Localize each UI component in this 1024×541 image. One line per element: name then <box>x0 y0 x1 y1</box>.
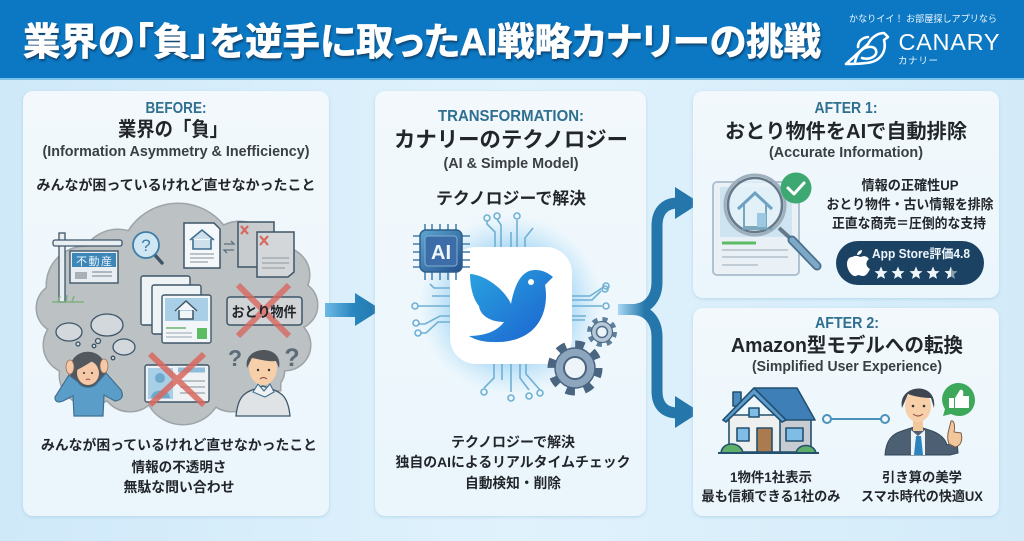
label: おとり物件 with cross: おとり物件 <box>232 304 296 320</box>
transformation label: TRANSFORMATION: <box>438 108 584 125</box>
icon: AI chip <box>413 224 470 280</box>
after 2 left text: 最も信頼できる1社のみ <box>702 488 840 504</box>
after 2 right text: 引き算の美学 <box>882 469 962 485</box>
logo: Canary <box>846 13 1000 67</box>
after 2 subtitle: (Simplified User Experience) <box>752 358 942 375</box>
badge: app store rating <box>836 241 984 285</box>
icon: house <box>718 388 819 453</box>
panel: transformation <box>375 91 646 516</box>
after 1 body text: おとり物件・古い情報を排除 <box>826 196 994 212</box>
title: 業界の「負」を逆手に取ったAI戦略カナリーの挑戦 <box>23 22 821 64</box>
arrow: fork to after panels <box>618 187 700 428</box>
after 1 heading: おとり物件をAIで自動排除 <box>725 120 967 143</box>
transformation bottom text: 独自のAIによるリアルタイムチェック <box>396 454 630 470</box>
icon: listing cards stack <box>141 276 211 343</box>
icon: AI chip: AI <box>431 242 451 264</box>
question marks: ? <box>228 345 242 371</box>
before subtitle: (Information Asymmetry & Inefficiency) <box>42 143 310 160</box>
after 1 body text <box>826 177 994 231</box>
before bottom text: 情報の不透明さ <box>132 459 226 475</box>
transformation bottom text <box>396 434 630 491</box>
after 2 heading: Amazon型モデルへの転換 <box>731 333 963 357</box>
icon: question magnifier: ? <box>141 236 151 255</box>
icon: businessman thumbs up <box>885 388 962 455</box>
transformation bottom text: テクノロジーで解決 <box>451 434 575 450</box>
icon: house document <box>184 223 220 268</box>
question marks: ? <box>284 344 300 372</box>
icon: circuit lines <box>412 213 609 401</box>
icon: app tile with bird <box>450 247 572 364</box>
before label: BEFORE: <box>146 100 206 117</box>
after 1 label: AFTER 1: <box>814 100 878 117</box>
icon: thought bubbles <box>56 314 135 360</box>
after 2 right text <box>861 469 983 504</box>
rating stars <box>874 266 958 279</box>
before bottom text <box>41 437 317 495</box>
icon: apple <box>847 250 870 276</box>
after 1 body text: 正直な商売＝圧倒的な支持 <box>832 215 986 231</box>
after 2 left text: 1物件1社表示 <box>730 469 812 485</box>
icon: question magnifier <box>133 232 162 263</box>
icon: like bubble <box>942 383 975 416</box>
after 2 label: AFTER 2: <box>815 315 879 332</box>
transformation subtitle: (AI & Simple Model) <box>444 155 578 172</box>
icon: crossed out listing <box>145 354 209 405</box>
icon: exchange arrows <box>224 241 234 253</box>
before heading: 業界の「負」 <box>118 118 228 141</box>
after 1 subtitle: (Accurate Information) <box>769 144 923 161</box>
icon: rejected documents <box>238 222 294 277</box>
rating text: App Store評価4.8 <box>872 246 970 261</box>
icon: worried woman <box>55 352 122 416</box>
before bottom text: みんなが困っているけれど直せなかったこと <box>41 437 317 453</box>
connector line <box>823 415 889 423</box>
arrow: before to transformation <box>325 293 381 326</box>
after 2 right text: スマホ時代の快適UX <box>861 488 983 504</box>
icon: small gear <box>590 320 614 344</box>
transformation heading: カナリーのテクノロジー <box>394 128 628 152</box>
label: おとり物件 with cross <box>227 285 302 336</box>
transformation lead text: テクノロジーで解決 <box>436 189 587 208</box>
before bottom text: 無駄な問い合わせ <box>124 479 234 495</box>
icon: canary outline bird <box>846 33 888 64</box>
question marks <box>228 344 300 372</box>
panel: after 1 <box>693 91 999 298</box>
icon: worried man <box>236 350 290 416</box>
after 1 body text: 情報の正確性UP <box>862 177 958 193</box>
after 2 left text <box>702 469 840 504</box>
icon: magnifier with house <box>725 175 817 266</box>
before lead text: みんなが困っているけれど直せなかったこと <box>36 177 316 193</box>
panel: after 2 <box>693 308 999 516</box>
icon: real estate sign <box>52 233 122 302</box>
logo wordmark: CANARY <box>898 29 1000 55</box>
logo katakana: カナリー <box>898 56 938 67</box>
panel: before <box>23 91 329 516</box>
logo tagline: かなりイイ！ お部屋探しアプリなら <box>849 13 997 25</box>
icon: large gear <box>552 344 598 392</box>
icon: real estate sign: 不動産 <box>76 254 112 268</box>
transformation bottom text: 自動検知・削除 <box>465 475 561 491</box>
header band <box>0 0 1024 80</box>
icon: green check badge <box>780 172 812 204</box>
app tile glow <box>419 215 603 395</box>
icon: document under magnifier <box>713 182 799 275</box>
illustration: grey cloud <box>37 204 317 424</box>
